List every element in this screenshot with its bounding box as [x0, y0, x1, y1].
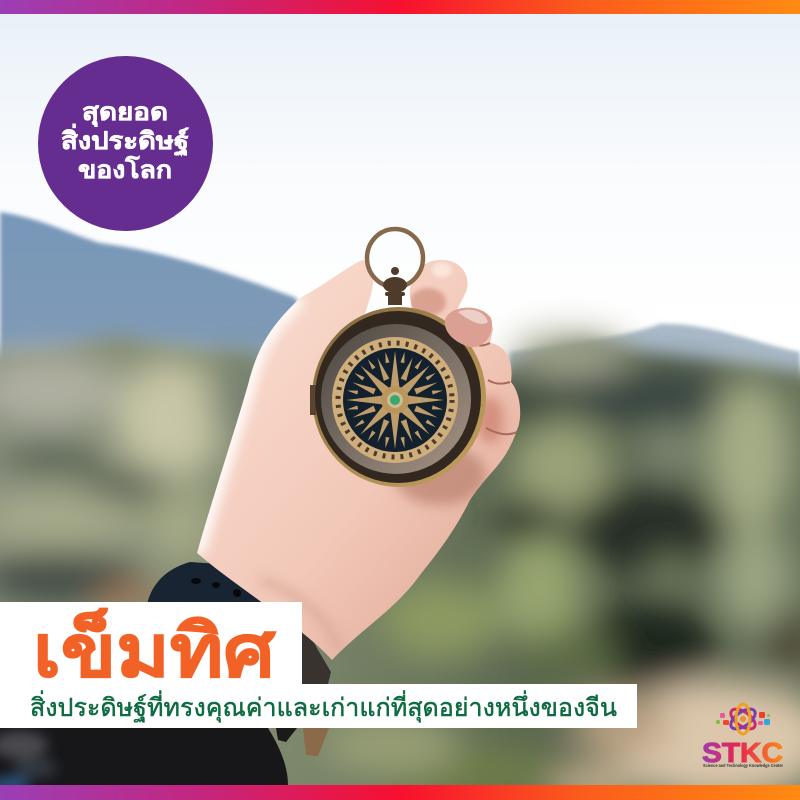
fingertip	[445, 308, 492, 347]
badge text: ของโลก	[78, 155, 172, 184]
blurred highlights on sleeve	[0, 731, 57, 791]
logo dots	[716, 712, 770, 725]
title: เข็มทิศ	[33, 608, 276, 692]
badge disc	[38, 56, 213, 231]
index finger shade	[410, 288, 446, 316]
compass hub inner	[387, 392, 403, 408]
bottom gradient bar	[0, 785, 800, 800]
strap under panel	[276, 728, 297, 742]
badge text	[61, 99, 189, 184]
logo atom icon	[728, 704, 758, 734]
fingertip highlight	[432, 263, 452, 277]
compass ring	[367, 229, 423, 287]
compass	[310, 229, 486, 487]
finger over compass edge	[445, 308, 492, 347]
finger creases	[474, 343, 517, 434]
title panel	[0, 602, 637, 728]
badge text: สิ่งประดิษฐ์	[61, 123, 189, 157]
top gradient bar	[0, 0, 800, 14]
badge: purple circle	[38, 56, 213, 231]
compass crown	[383, 267, 407, 305]
sleeve body	[0, 728, 288, 785]
strap holes	[191, 578, 241, 597]
watch buckle tab	[303, 728, 329, 756]
watch strap on wrist	[147, 562, 331, 742]
compass inner bezel	[315, 311, 481, 483]
compass hub	[381, 386, 409, 414]
compass case	[312, 307, 486, 487]
strap side	[302, 620, 331, 684]
logo: STKC	[702, 704, 783, 768]
compass rose	[346, 351, 444, 449]
logo wordmark: STKC	[702, 737, 783, 768]
dial tick marks	[338, 343, 452, 457]
logo tagline: Science and Technology Knowledge Center	[703, 763, 783, 768]
fingernail	[458, 310, 488, 324]
hand shading	[197, 263, 517, 650]
dark sleeve at lower left	[0, 728, 288, 791]
strap band	[147, 562, 288, 604]
subtitle: สิ่งประดิษฐ์ที่ทรงคุณค่าและเก่าแก่ที่สุดอย่างหนึ่งของจีน	[30, 690, 617, 723]
compass glass	[321, 324, 471, 474]
badge text: สุดยอด	[82, 99, 168, 128]
dial ring	[332, 337, 458, 463]
compass side tab	[310, 385, 316, 415]
hand holding the compass	[197, 260, 520, 660]
hand silhouette	[197, 260, 520, 660]
green jewel	[390, 395, 400, 405]
dial face	[343, 348, 447, 452]
